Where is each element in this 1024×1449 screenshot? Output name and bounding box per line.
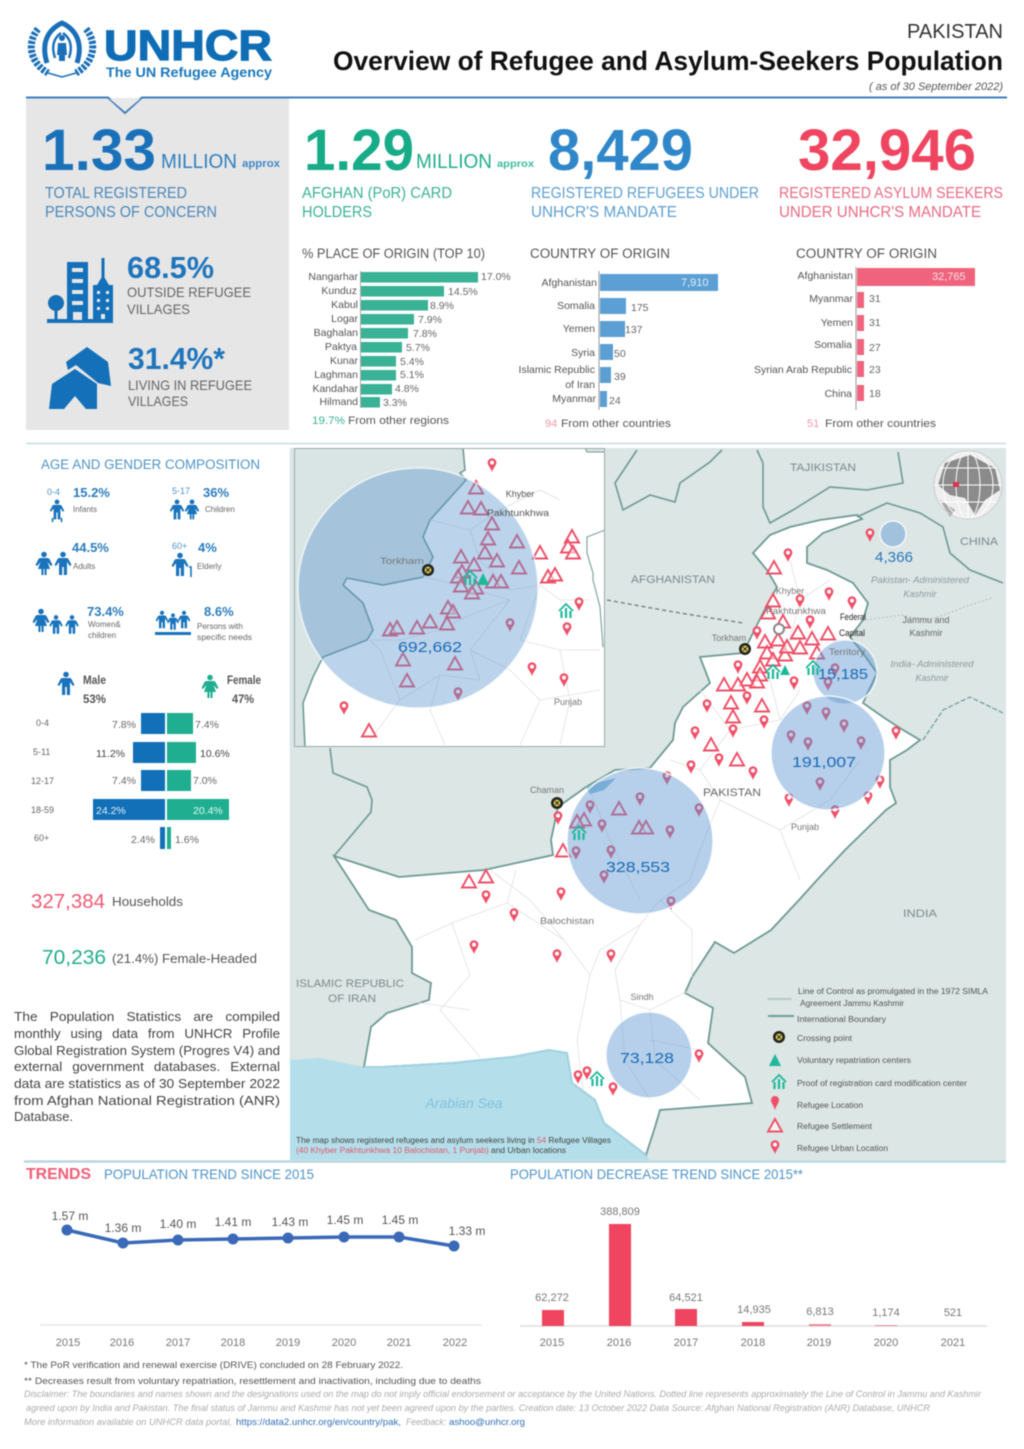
bar chart: place of origin: Kabul — [331, 299, 358, 311]
place labels: INDIA — [903, 908, 938, 920]
stat: women and children: Women& — [88, 620, 121, 629]
circle values: 4,366 — [875, 549, 913, 566]
stat: children: 5-17 — [172, 486, 190, 496]
inset map: Khyber — [506, 489, 534, 499]
male label: Male — [83, 675, 106, 687]
approx: approx — [242, 158, 281, 170]
text block: population statistics note: data are statistics as of 30 September 2022 — [14, 1076, 280, 1091]
line chart: population trend: 2016 — [110, 1337, 134, 1349]
place labels: Kashmir — [915, 673, 950, 683]
place labels: ISLAMIC REPUBLIC — [296, 978, 404, 990]
line chart: population trend: 1.40 m — [160, 1217, 196, 1231]
bar chart: asylum seekers country of origin: Somalia — [814, 339, 852, 351]
footnotes and disclaimer: agreed upon by India and Pakistan. The final status of Jammu and Kashmir has not yet been agreed upon by the parties. Creation date: 13 October 2022 Data Source: Afghan National Registration (ANR) Database, UNHCR — [26, 1403, 930, 1414]
unit million: MILLION — [161, 151, 237, 173]
bar chart: asylum seekers country of origin: 32,765 — [932, 271, 966, 283]
bar chart: population decrease trend: 2016 — [607, 1337, 631, 1349]
inset value: 692,662 — [398, 639, 462, 656]
stat: children — [170, 485, 235, 519]
caption: TOTAL REGISTERED — [45, 185, 187, 202]
other countries note: 51 — [807, 418, 819, 430]
stat: PoR card holders: AFGHAN (PoR) CARD — [302, 185, 452, 202]
place labels: PAKISTAN — [703, 787, 761, 799]
footnotes and disclaimer: ** Decreases result from voluntary repatriation, resettlement and inactivation, including due to deaths — [24, 1376, 481, 1387]
footnotes and disclaimer: More information available on UNHCR data portal, — [24, 1417, 232, 1428]
bar chart: asylum seekers country of origin: China — [825, 388, 852, 400]
legend: Crossing point — [797, 1034, 853, 1043]
line chart: population trend: 2022 — [443, 1337, 467, 1349]
female label: 47% — [232, 692, 254, 706]
legend: Voluntary repatriation centers — [797, 1056, 911, 1065]
place labels: OF IRAN — [328, 993, 376, 1005]
country: PAKISTAN — [907, 21, 1003, 43]
other regions note: 19.7% — [312, 415, 345, 427]
map note: The map shows registered refugees and asylum seekers living in 54 Refugee Villages — [296, 1136, 611, 1145]
stat: households: Households — [112, 895, 183, 909]
line chart: population trend: 2015 — [56, 1337, 80, 1349]
text block: population statistics note: external government databases. External — [14, 1059, 280, 1074]
bar chart: refugees country of origin: Somalia — [557, 300, 595, 312]
bar chart: place of origin: Kunduz — [321, 285, 357, 297]
male label — [58, 672, 106, 706]
bar chart: place of origin: 14.5% — [448, 286, 478, 298]
bar chart: refugees country of origin: Islamic Republic — [519, 364, 595, 376]
population pyramid: 7.0% — [193, 775, 217, 787]
bar chart: population decrease trend — [510, 1166, 987, 1349]
stat: PoR card holders — [302, 118, 534, 221]
text block: population statistics note — [14, 1009, 280, 1124]
section heading: trends: TRENDS — [26, 1166, 91, 1183]
circle values: 73,128 — [620, 1050, 674, 1067]
female label — [202, 675, 261, 706]
female label: Female — [227, 675, 261, 687]
bar chart: place of origin: Baghalan — [314, 327, 358, 339]
chart heading: COUNTRY OF ORIGIN — [530, 246, 670, 261]
bar chart: place of origin: 4.8% — [395, 383, 419, 395]
bar chart: population decrease trend: 2018 — [741, 1337, 765, 1349]
legend: International Boundary — [797, 1015, 886, 1024]
line chart: population trend: 1.57 m — [52, 1209, 88, 1223]
panel: total registered: VILLAGES — [127, 301, 190, 317]
footnotes and disclaimer: ashoo@unhcr.org — [449, 1417, 525, 1428]
stat: infants: 0-4 — [47, 487, 60, 497]
place labels: India- Administered — [890, 659, 975, 669]
refugee location pins — [470, 528, 900, 1096]
circle values: 191,007 — [792, 754, 856, 771]
line chart: population trend — [40, 1166, 485, 1349]
population pyramid: 18-59 — [31, 805, 54, 815]
caption outside villages: OUTSIDE REFUGEE — [127, 284, 251, 300]
bar chart: place of origin: 7.9% — [418, 314, 442, 326]
chart heading: % PLACE OF ORIGIN (TOP 10) — [302, 246, 485, 261]
population pyramid: 20.4% — [193, 805, 223, 817]
population pyramid: 7.4% — [112, 775, 136, 787]
population pyramid: 60+ — [34, 833, 49, 843]
place labels: CHINA — [960, 536, 999, 548]
population pyramid: 0-4 — [36, 718, 49, 728]
stat: female-headed households: 70,236 — [42, 947, 106, 969]
bar chart: asylum seekers country of origin: Myanmar — [809, 293, 853, 305]
bar chart: refugees country of origin: Syria — [571, 347, 595, 359]
place labels: Kashmir — [909, 628, 943, 638]
stat: women and children — [32, 604, 124, 640]
stat: elderly — [172, 540, 221, 577]
panel: total registered: PERSONS OF CONCERN — [45, 204, 217, 221]
big number 1.33: 1.33 — [42, 118, 156, 183]
bar chart: population decrease trend: 6,813 — [806, 1306, 834, 1318]
population pyramid: 1.6% — [175, 834, 199, 846]
stat: adults: Adults — [73, 562, 95, 571]
main title: Overview of Refugee and Asylum-Seekers Population — [333, 46, 1003, 76]
other countries note: 94 — [545, 418, 557, 430]
stat: PoR card holders: 1.29 — [304, 118, 414, 183]
stat: specific needs — [155, 604, 252, 642]
line chart: population trend: 2018 — [221, 1337, 245, 1349]
lake — [586, 778, 616, 794]
line chart: population trend: 1.33 m — [449, 1224, 485, 1238]
stat: female-headed households — [42, 947, 257, 969]
bar chart: place of origin: 3.3% — [383, 397, 407, 409]
bar chart: asylum seekers country of origin: Syrian Arab Republic — [754, 364, 852, 376]
bar chart: refugees country of origin: 137 — [625, 324, 643, 336]
place labels: Pakistan- Administered — [871, 575, 970, 585]
place labels: Pakhtunkhwa — [766, 606, 826, 616]
bar chart: population decrease trend: 2015 — [540, 1337, 564, 1349]
bar chart: asylum seekers country of origin — [754, 246, 975, 430]
population pyramid: 24.2% — [96, 805, 126, 817]
stat: registered refugees — [531, 118, 759, 221]
bar chart: place of origin: Logar — [331, 313, 358, 325]
proportional circles — [567, 521, 906, 1098]
population pyramid: 5-11 — [33, 747, 50, 757]
stat: children: Children — [205, 505, 235, 514]
bar chart: place of origin: 17.0% — [481, 271, 511, 283]
bar chart: place of origin: Kunar — [330, 355, 358, 367]
bar chart: place of origin: Hilmand — [319, 396, 358, 408]
bar chart: place of origin: Laghman — [314, 369, 358, 381]
legend: Proof of registration card modification center — [797, 1079, 967, 1088]
stat: women and children: children — [88, 631, 116, 640]
map note: (40 Khyber Pakhtunkhwa 10 Balochistan, 1 Punjab) and Urban locations — [296, 1146, 566, 1155]
stat: registered asylum seekers — [779, 118, 1003, 221]
icon: city buildings — [47, 258, 113, 323]
heading: AGE AND GENDER COMPOSITION — [41, 457, 260, 472]
bar chart: population decrease trend: 1,174 — [872, 1307, 900, 1319]
stat: households: 327,384 — [31, 891, 105, 913]
bar chart: place of origin: 7.8% — [413, 328, 437, 340]
chart heading: POPULATION TREND SINCE 2015 — [104, 1166, 314, 1182]
text block: population statistics note: Database. — [14, 1109, 73, 1124]
legend — [768, 987, 989, 1154]
circle values: 328,553 — [606, 859, 670, 876]
place labels: Territory — [829, 647, 866, 657]
line chart: population trend: 1.36 m — [105, 1221, 141, 1235]
footnotes and disclaimer: * The PoR verification and renewal exercise (DRIVE) concluded on 28 February 2022. — [24, 1360, 403, 1371]
caption living in villages: LIVING IN REFUGEE — [128, 377, 252, 393]
line chart: population trend: 1.41 m — [215, 1215, 251, 1229]
bar chart: refugees country of origin: Yemen — [563, 323, 595, 335]
legend: Agreement Jammu Kashmir — [800, 999, 904, 1008]
legend: Refugee Urban Location — [797, 1144, 888, 1153]
bar chart: refugees country of origin: 24 — [609, 395, 621, 407]
text block: population statistics note: from Afghan National Registration (ANR) — [14, 1093, 280, 1108]
stat: adults: 44.5% — [72, 540, 109, 555]
stat: elderly: Elderly — [197, 562, 221, 571]
line chart: population trend: 2019 — [276, 1337, 300, 1349]
bar chart: population decrease trend: 14,935 — [737, 1304, 771, 1316]
stat: specific needs: 8.6% — [204, 604, 234, 619]
footnotes and disclaimer: https://data2.unhcr.org/en/country/pak, — [236, 1417, 401, 1428]
place labels: Federal — [840, 612, 866, 622]
bar chart: refugees country of origin: 7,910 — [681, 277, 709, 289]
tagline: The UN Refugee Agency — [106, 64, 272, 80]
logo: UNHCR — [31, 22, 272, 80]
wordmark: UNHCR — [104, 22, 272, 70]
place labels: Kashmir — [903, 589, 938, 599]
inset map: Pakhtunkhwa — [487, 508, 549, 518]
stat 31.4%: 31.4%* — [128, 341, 226, 376]
panel: total registered: VILLAGES — [128, 393, 188, 409]
population pyramid — [31, 713, 230, 849]
text block: population statistics note: Global Registration System (Progres V4) and — [14, 1043, 280, 1058]
bar chart: place of origin: Kandahar — [312, 383, 358, 395]
title block — [333, 21, 1003, 93]
footnotes and disclaimer — [24, 1360, 982, 1428]
stat: female-headed households: (21.4%) Female-Headed — [112, 952, 257, 966]
bar chart: population decrease trend: 62,272 — [535, 1292, 569, 1304]
bar chart: place of origin: From other regions — [348, 415, 450, 427]
bar chart: asylum seekers country of origin: Afghanistan — [798, 270, 853, 282]
Pakistan territory — [334, 515, 920, 1155]
place labels: Torkham — [712, 633, 746, 643]
date: ( as of 30 September 2022) — [869, 81, 1003, 93]
stat: registered asylum seekers: REGISTERED ASYLUM SEEKERS — [779, 185, 1003, 202]
text block: population statistics note: monthly using data from UNHCR Profile — [14, 1026, 280, 1041]
globe locator — [934, 451, 1002, 519]
chart heading: POPULATION DECREASE TREND SINCE 2015** — [510, 1166, 804, 1182]
bar chart: asylum seekers country of origin: 23 — [869, 364, 881, 376]
bar chart: refugees country of origin: Myanmar — [552, 393, 596, 405]
population pyramid: 7.8% — [112, 719, 136, 731]
stat: specific needs: Persons with — [197, 622, 243, 631]
stat: households — [31, 891, 183, 913]
population pyramid: 11.2% — [96, 748, 125, 760]
place labels: TAJIKISTAN — [790, 462, 856, 474]
bar chart: refugees country of origin: of Iran — [565, 379, 595, 391]
place labels: Khyber — [776, 586, 804, 596]
bar chart: population decrease trend: 2019 — [807, 1337, 831, 1349]
bar chart: place of origin: 5.1% — [400, 369, 424, 381]
stat: elderly: 4% — [198, 540, 217, 555]
stat: children: 36% — [203, 485, 229, 500]
bar chart: population decrease trend: 2017 — [674, 1337, 698, 1349]
line chart: population trend: 1.43 m — [272, 1215, 308, 1229]
population pyramid: 10.6% — [200, 748, 230, 760]
line chart: population trend: 2021 — [387, 1337, 411, 1349]
inset labels: Torkham — [380, 556, 424, 566]
place labels: Arabian Sea — [424, 1095, 503, 1111]
place labels: Capital — [839, 628, 865, 638]
icon: tents — [49, 347, 111, 409]
panel: total registered — [26, 98, 1007, 430]
bar chart: population decrease trend: 2021 — [941, 1337, 965, 1349]
icon: UNHCR wreath and sheltering hands — [31, 23, 93, 77]
inset map — [294, 448, 605, 747]
bar chart: asylum seekers country of origin: 31 — [869, 293, 881, 305]
bar chart: refugees country of origin — [519, 246, 718, 430]
stat: elderly: 60+ — [172, 541, 187, 551]
line chart: population trend: 2017 — [166, 1337, 190, 1349]
bar chart: place of origin: Nangarhar — [308, 271, 358, 283]
sea — [290, 1050, 650, 1160]
bar chart: place of origin: 5.7% — [406, 342, 430, 354]
place labels: Sindh — [630, 992, 654, 1002]
stat: registered refugees: REGISTERED REFUGEES UNDER — [531, 185, 759, 202]
panel: age and gender composition — [31, 457, 261, 849]
chart heading: COUNTRY OF ORIGIN — [796, 246, 937, 261]
line chart: population trend: 1.45 m — [382, 1213, 418, 1227]
place labels: Chaman — [530, 785, 564, 795]
stat 68.5%: 68.5% — [127, 250, 214, 285]
bar chart: asylum seekers country of origin: From other countries — [825, 418, 937, 430]
bar chart: population decrease trend: 521 — [944, 1307, 962, 1319]
bar chart: population decrease trend: 388,809 — [600, 1206, 640, 1218]
repatriation and PoR centres — [572, 661, 820, 1086]
line chart: population trend: 1.45 m — [327, 1213, 363, 1227]
inset map: Punjab — [554, 697, 582, 707]
stat: registered asylum seekers: UNDER UNHCR'S MANDATE — [779, 204, 981, 221]
stat: infants: 15.2% — [73, 485, 110, 500]
map: Pakistan refugee locations — [290, 447, 1006, 1160]
stat: PoR card holders: approx — [497, 159, 534, 170]
bar chart: refugees country of origin: 175 — [631, 302, 649, 314]
place labels: Jammu and — [902, 615, 950, 625]
bar chart: place of origin — [302, 246, 511, 427]
bar chart: refugees country of origin: 39 — [614, 371, 626, 383]
stat: infants: Infants — [73, 505, 97, 514]
bar chart: population decrease trend: 2020 — [874, 1337, 898, 1349]
population pyramid: 12-17 — [31, 776, 54, 786]
bar chart: asylum seekers country of origin: Yemen — [821, 317, 853, 329]
bar chart: asylum seekers country of origin: 18 — [869, 388, 881, 400]
legend: Line of Control as promulgated in the 1972 SIMLA — [798, 987, 989, 996]
population pyramid: 7.4% — [195, 719, 219, 731]
stat: adults — [36, 540, 109, 575]
place labels: Balochistan — [540, 916, 594, 926]
place labels: AFGHANISTAN — [631, 574, 715, 586]
place labels — [296, 462, 999, 1111]
bar chart: asylum seekers country of origin: 27 — [869, 342, 881, 354]
bar chart: refugees country of origin: Afghanistan — [542, 277, 597, 289]
bar chart: refugees country of origin: From other countries — [561, 418, 672, 430]
circle values — [606, 549, 913, 1067]
stat: PoR card holders: HOLDERS — [302, 204, 372, 221]
footnotes and disclaimer: Disclaimer: The boundaries and names shown and the designations used on the map do not imply official endorsement or acceptance by the United Nations. Dotted line represents approximately the Line of Control in Jammu and Kashmir — [24, 1389, 982, 1400]
crossing points — [551, 624, 784, 809]
bar chart: place of origin: 5.4% — [400, 356, 424, 368]
refugee settlement triangles — [462, 561, 835, 888]
stat: PoR card holders: MILLION — [416, 151, 492, 173]
neighbouring boundaries — [330, 450, 1003, 856]
population pyramid: 2.4% — [131, 834, 155, 846]
stat: specific needs: specific needs — [197, 633, 252, 642]
circle values: 15,185 — [818, 666, 868, 683]
legend: Refugee Location — [797, 1101, 863, 1110]
stat: registered refugees: 8,429 — [548, 118, 693, 183]
bar chart: population decrease trend: 64,521 — [669, 1292, 703, 1304]
place labels: Punjab — [791, 822, 819, 832]
stat: infants — [47, 485, 110, 522]
male label: 53% — [83, 692, 106, 706]
bar chart: refugees country of origin: 50 — [614, 348, 626, 360]
stat: women and children: 73.4% — [87, 604, 124, 619]
text block: population statistics note: The Population Statistics are compiled — [14, 1009, 280, 1024]
line chart: population trend: 2020 — [332, 1337, 356, 1349]
bar chart: place of origin: 8.9% — [430, 300, 454, 312]
stat: registered asylum seekers: 32,946 — [798, 118, 976, 183]
footnotes and disclaimer: Feedback: — [406, 1417, 446, 1428]
map note — [296, 1136, 611, 1155]
bar chart: asylum seekers country of origin: 31 — [869, 317, 881, 329]
stat: registered refugees: UNHCR'S MANDATE — [531, 204, 677, 221]
legend: Refugee Settlement — [797, 1122, 873, 1131]
bar chart: place of origin: Paktya — [325, 341, 357, 353]
